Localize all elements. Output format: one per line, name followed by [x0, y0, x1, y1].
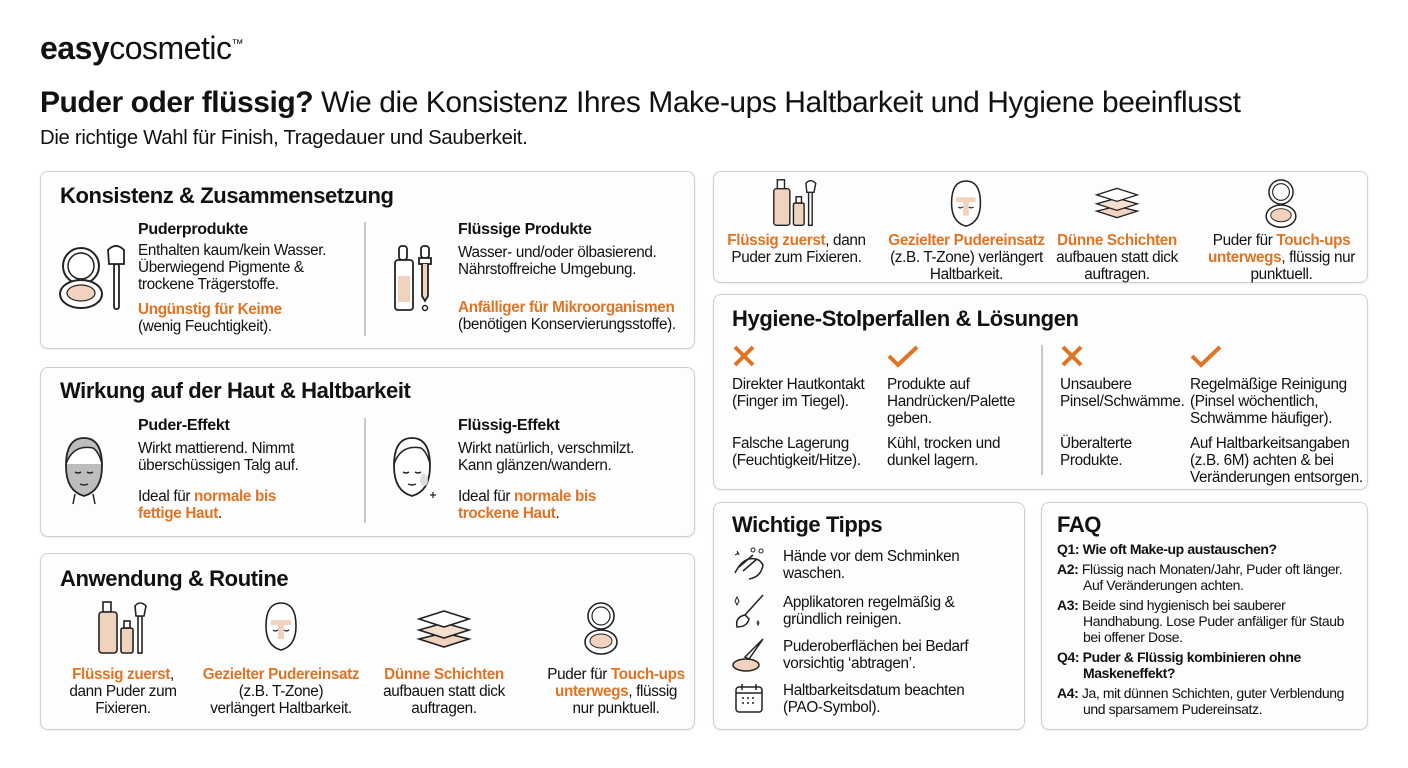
icon: layers	[1094, 188, 1140, 218]
text: tip hands	[783, 548, 959, 582]
panel: FAQ	[1041, 502, 1368, 730]
text: tip 4	[1208, 232, 1356, 283]
text: step 3	[383, 666, 506, 717]
icon: spatula powder	[732, 638, 764, 672]
panel: Konsistenz	[40, 171, 695, 349]
text: tip applicators: gründlich reinigen.	[783, 611, 901, 628]
text: pitfall 3: Pinsel/Schwämme.	[1060, 393, 1184, 410]
text: tip 1: Puder zum Fixieren.	[731, 249, 862, 266]
text: Puder-Effekt: Puder-Effekt	[138, 417, 230, 434]
faq list: A2: Flüssig nach Monaten/Jahr, Puder oft länger.	[1057, 561, 1342, 577]
panel: Wirkung: trockene Haut.	[458, 505, 559, 522]
text: tip 2: Haltbarkeit.	[930, 266, 1003, 283]
text: tip 2: (z.B. T-Zone) verlängert	[890, 249, 1043, 266]
text: step 2: verlängert Haltbarkeit.	[210, 700, 352, 717]
icon: check 1	[888, 346, 918, 368]
text: tip surface	[783, 638, 969, 672]
text: pitfall 3	[1060, 376, 1184, 410]
text: Flüssige Produkte: Flüssige Produkte	[458, 221, 592, 238]
text: tip 3	[1056, 232, 1178, 283]
text: tip surface: vorsichtig ‘abtragen’.	[783, 655, 916, 672]
icon: matte face	[65, 437, 103, 504]
text: solution 1: Produkte auf	[887, 376, 970, 393]
panel: Anwendung	[40, 553, 695, 730]
icon: cross 2	[1062, 346, 1082, 366]
text: step 1: Flüssig zuerst,	[72, 666, 174, 683]
text: step 2: (z.B. T-Zone)	[239, 683, 323, 700]
text: pitfall 1: Direkter Hautkontakt	[732, 376, 864, 393]
text: solution 4: Auf Haltbarkeitsangaben	[1190, 435, 1349, 452]
text: tip applicators: Applikatoren regelmäßig &	[783, 594, 955, 611]
text: step 3: auftragen.	[411, 700, 477, 717]
icon: layers	[416, 610, 472, 648]
icon: face t-zone	[950, 180, 982, 227]
text: tip 3: aufbauen statt dick	[1056, 249, 1178, 266]
text: step 4	[547, 666, 685, 717]
text: step 4: Puder für Touch-ups	[547, 666, 685, 683]
heading: Wichtige Tipps	[732, 512, 882, 537]
text: step 3: aufbauen statt dick	[383, 683, 505, 700]
faq list: Q4: Puder & Flüssig kombinieren ohne	[1057, 649, 1301, 665]
faq list: Q1: Wie oft Make-up austauschen?	[1057, 541, 1277, 557]
panel: Wirkung: Ideal für normale bis	[138, 488, 276, 505]
panel: Konsistenz: Nährstoffreiche Umgebung.	[458, 261, 636, 278]
text: solution 2: dunkel lagern.	[887, 452, 978, 469]
text: tip 2	[888, 232, 1045, 283]
text: tip 3: auftragen.	[1084, 266, 1150, 283]
text: tip 3: Dünne Schichten	[1057, 232, 1177, 249]
panel: Konsistenz: Überwiegend Pigmente &	[138, 259, 304, 276]
text: step 3: Dünne Schichten	[384, 666, 504, 683]
text: tip hands: waschen.	[783, 565, 845, 582]
text: solution 2	[887, 435, 1000, 469]
text: solution 3	[1190, 376, 1347, 427]
text: pitfall 2	[732, 435, 861, 469]
icon: compact	[1265, 179, 1297, 228]
text: solution 3: (Pinsel wöchentlich,	[1190, 393, 1318, 410]
faq list: A4: Ja, mit dünnen Schichten, guter Verblendung	[1057, 685, 1344, 701]
panel: Wirkung: Wirkt natürlich, verschmilzt.	[458, 440, 634, 457]
panel: Konsistenz: Enthalten kaum/kein Wasser.	[138, 242, 326, 259]
icon: compact	[584, 602, 618, 655]
panel: Hygiene	[713, 294, 1368, 490]
panel: Konsistenz: (wenig Feuchtigkeit).	[138, 318, 272, 335]
subtitle: Die richtige Wahl für Finish, Tragedauer und Sauberkeit.	[40, 127, 527, 149]
icon: natural face	[393, 437, 436, 498]
panel: Wichtige Tipps	[713, 502, 1025, 730]
text: tip surface: Puderoberflächen bei Bedarf	[783, 638, 968, 655]
panel: Wirkung: überschüssigen Talg auf.	[138, 457, 299, 474]
panel: Konsistenz: Anfälliger für Mikroorganismen	[458, 299, 674, 316]
text: step 1	[69, 666, 177, 717]
icon: hands	[734, 548, 764, 580]
text: tip 4: Puder für Touch-ups	[1213, 232, 1350, 249]
text: solution 3: Regelmäßige Reinigung	[1190, 376, 1347, 393]
icon: products	[98, 601, 147, 654]
faq list	[1057, 541, 1367, 717]
panel: Konsistenz: Ungünstig für Keime	[138, 301, 282, 318]
text: step 4: nur punktuell.	[573, 700, 659, 717]
text: pitfall 4: Überalterte	[1060, 435, 1132, 452]
text: Flüssig-Effekt: Flüssig-Effekt	[458, 417, 560, 434]
text: tip 4: punktuell.	[1250, 266, 1312, 283]
text: pitfall 4	[1060, 434, 1132, 469]
text: solution 1	[887, 376, 1015, 427]
text: tip date: (PAO-Symbol).	[783, 699, 880, 716]
icon: products	[773, 179, 816, 226]
icon: cross 1	[734, 346, 754, 366]
heading: Anwendung & Routine	[60, 566, 288, 591]
panel: Wirkung	[40, 367, 695, 537]
faq list: bei offener Dose.	[1083, 629, 1183, 645]
panel: Anwendung (right top)	[713, 171, 1368, 283]
panel: Konsistenz: trockene Trägerstoffe.	[138, 276, 279, 293]
text: tip applicators	[783, 594, 955, 628]
faq list: A3: Beide sind hygienisch bei sauberer	[1057, 597, 1285, 613]
panel: Wirkung: fettige Haut.	[138, 505, 222, 522]
text: tip 1	[727, 232, 866, 266]
text: pitfall 2: (Feuchtigkeit/Hitze).	[732, 452, 861, 469]
text: pitfall 4: Produkte.	[1060, 452, 1122, 469]
icon: bottle and dropper	[394, 245, 432, 312]
text: solution 4	[1190, 435, 1363, 486]
text: tip date: Haltbarkeitsdatum beachten	[783, 682, 964, 699]
panel: Konsistenz: (benötigen Konservierungsstoffe).	[458, 316, 676, 333]
text: pitfall 1	[732, 376, 865, 410]
text: solution 4: Veränderungen entsorgen.	[1190, 469, 1363, 486]
text: tip hands: Hände vor dem Schminken	[783, 548, 959, 565]
heading: Hygiene-Stolperfallen & Lösungen	[732, 306, 1079, 331]
icon: calendar	[735, 683, 763, 713]
text: step 1: dann Puder zum	[69, 683, 177, 700]
text: step 4: unterwegs, flüssig	[555, 683, 677, 700]
panel: Wirkung: Wirkt mattierend. Nimmt	[138, 440, 294, 457]
heading: Konsistenz & Zusammensetzung	[60, 183, 394, 208]
text: solution 1: geben.	[887, 410, 932, 427]
text: solution 4: (z.B. 6M) achten & bei	[1190, 452, 1334, 469]
text: step 2	[203, 666, 359, 717]
heading: Wirkung auf der Haut & Haltbarkeit	[60, 378, 410, 403]
faq list: Auf Veränderungen achten.	[1083, 577, 1243, 593]
text: step 2: Gezielter Pudereinsatz	[203, 666, 359, 683]
text: solution 3: Schwämme häufiger).	[1190, 410, 1332, 427]
panel: Wirkung: Ideal für normale bis	[458, 488, 596, 505]
text: pitfall 2: Falsche Lagerung	[732, 435, 849, 452]
icon: brush	[734, 594, 764, 628]
text: pitfall 3: Unsaubere	[1060, 376, 1132, 393]
text: Puderprodukte: Puderprodukte	[138, 221, 248, 238]
panel: Wirkung: Kann glänzen/wandern.	[458, 457, 611, 474]
title: Puder oder flüssig? Wie die Konsistenz Ihres Make-ups Haltbarkeit und Hygiene beeinflusst	[40, 86, 1240, 119]
heading: FAQ	[1057, 512, 1101, 537]
icon: face t-zone	[265, 602, 297, 651]
text: tip date	[783, 682, 964, 716]
text: solution 2: Kühl, trocken und	[887, 435, 1000, 452]
faq list: Maskeneffekt?	[1083, 665, 1175, 681]
icon: check 2	[1190, 346, 1222, 368]
text: step 1: Fixieren.	[95, 700, 151, 717]
panel: Konsistenz: Wasser- und/oder ölbasierend.	[458, 244, 656, 261]
faq list: und sparsamem Pudereinsatz.	[1083, 701, 1262, 717]
icon: compact and brush	[59, 245, 125, 310]
text: pitfall 1: (Finger im Tiegel).	[732, 393, 849, 410]
faq list: Handhabung. Lose Puder anfäliger für Staub	[1083, 613, 1344, 629]
text: tip 1: Flüssig zuerst, dann	[727, 232, 866, 249]
logo: easycosmetic™	[40, 30, 243, 66]
text: tip 4: unterwegs, flüssig nur	[1208, 249, 1355, 266]
text: solution 1: Handrücken/Palette	[887, 393, 1015, 410]
text: tip 2: Gezielter Pudereinsatz	[888, 232, 1045, 249]
